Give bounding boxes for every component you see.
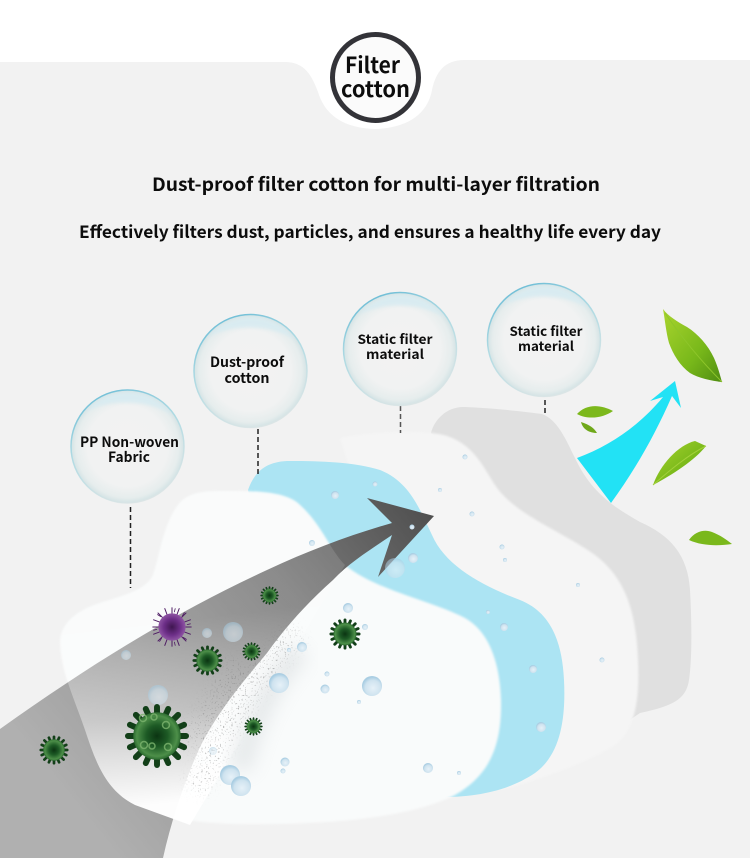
leaf: small lower <box>581 422 597 433</box>
droplets on arrow <box>121 558 405 755</box>
filter layer: grey back layer <box>431 407 691 740</box>
badge: Filter cotton <box>332 34 418 120</box>
bubble: PP Non-woven Fabric <box>70 390 184 504</box>
filter layer: pale static layer <box>340 432 638 790</box>
bubble: Dust-proof cotton: Dust-proof <box>210 352 285 372</box>
bubble: Static filter material (right): Static filter <box>510 321 583 340</box>
leaf: middle <box>653 441 706 485</box>
leaf: lower <box>689 531 732 545</box>
leaf: small upper <box>577 406 613 418</box>
droplets <box>220 454 604 796</box>
bubble: Static filter material (left): material <box>366 344 424 363</box>
bubble: Dust-proof cotton <box>194 314 308 428</box>
viruses: small green <box>41 587 359 763</box>
subheading: Effectively filters dust, particles, and ensures a healthy life every day <box>79 218 661 243</box>
heading: Dust-proof filter cotton for multi-layer filtration <box>152 171 600 197</box>
bubble: Static filter material (right): material <box>518 336 574 355</box>
virus: large green <box>128 707 186 765</box>
bubble: Static filter material (right) <box>487 283 601 397</box>
badge: Filter cotton: cotton <box>341 72 410 104</box>
arrow: clean air cyan <box>577 381 681 503</box>
leaf: large <box>663 309 722 382</box>
dust shadow <box>240 650 300 770</box>
bubble: PP Non-woven Fabric: Fabric <box>108 447 150 467</box>
bubble: Dust-proof cotton: cotton <box>224 368 270 388</box>
front layer veil over arrow <box>60 491 345 825</box>
arrow: grey incoming air <box>0 498 434 858</box>
dashed connector lines <box>130 400 545 588</box>
filter layer: white front layer <box>60 491 501 824</box>
bubble: Static filter material (left) <box>343 292 457 406</box>
badge: Filter cotton: Filter <box>345 48 400 80</box>
virus: purple <box>153 608 191 646</box>
dust particles <box>190 632 296 790</box>
bubble: Static filter material (left): Static filter <box>358 329 433 348</box>
bubble: PP Non-woven Fabric: PP Non-woven <box>80 432 179 452</box>
filter layer: blue layer <box>248 461 564 797</box>
